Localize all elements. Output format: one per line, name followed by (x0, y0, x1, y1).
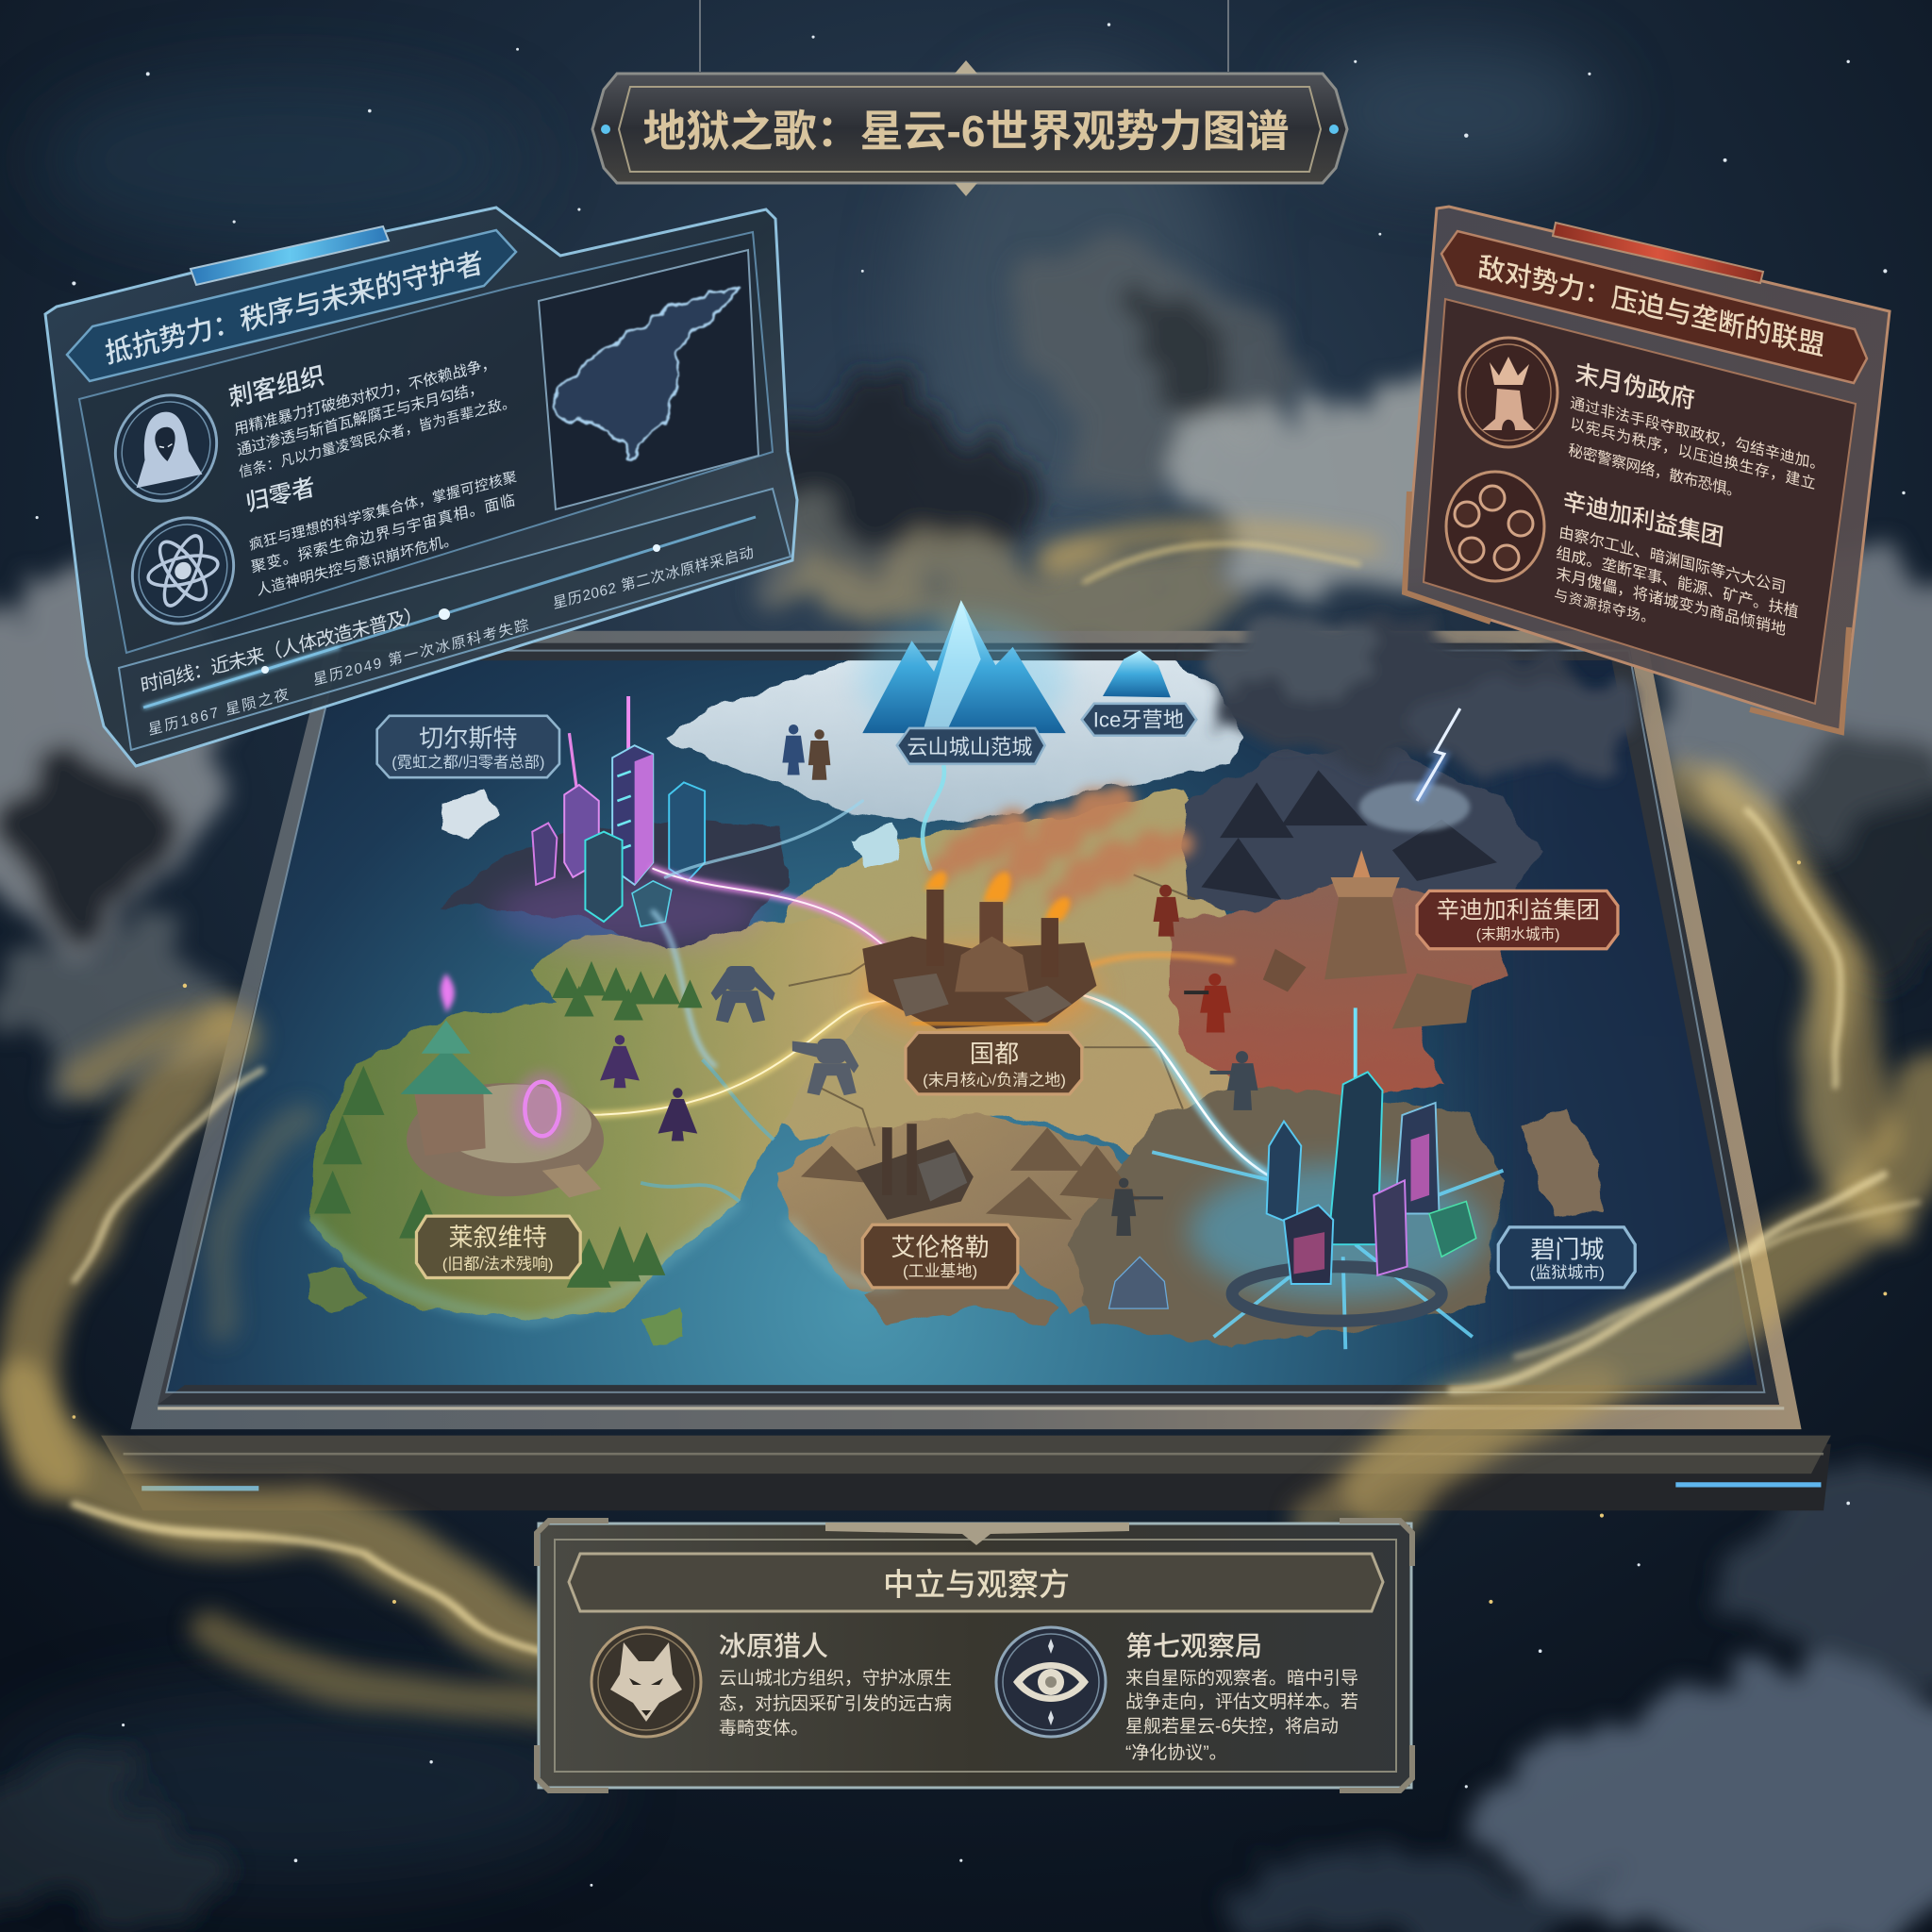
text block: syndicate: 辛迪加利益集团 (1561, 488, 1725, 551)
text block: zero returners: 疯狂与理想的科学家集合体，掌握可控核聚 (248, 469, 518, 554)
label: 辛迪加利益集团: (末期水城市) (1476, 925, 1559, 942)
panel image: nebula map (539, 250, 758, 509)
panel: resistance forces (45, 208, 797, 766)
lightning bolt (1417, 708, 1460, 801)
panel title bar: 中立与观察方 (883, 1567, 1070, 1602)
timeline: 星历1867 星陨之夜 (147, 686, 290, 739)
map frame outer body (106, 1444, 1831, 1510)
label: 碧门城: 碧门城 (1530, 1236, 1605, 1264)
text block: ice hunters: 毒畸变体。 (719, 1718, 808, 1739)
lightning crater (1359, 708, 1470, 832)
label: 碧门城: (监狱城市) (1530, 1263, 1605, 1281)
text block: syndicate (1554, 488, 1800, 639)
label: 艾伦格勒: 艾伦格勒 (891, 1233, 990, 1261)
text block: assassins: 用精准暴力打破绝对权力，不依赖战争， (233, 355, 497, 439)
city: Cherst neon towers (492, 696, 764, 949)
icon: hooded assassin (110, 386, 222, 510)
text block: seventh observatory: 星舰若星云-6失控，将启动 (1125, 1716, 1339, 1737)
text block: ice hunters (719, 1631, 952, 1739)
text block: syndicate: 与资源掠夺场。 (1554, 587, 1656, 627)
label: 莱叙维特: (旧都/法术残响) (442, 1255, 554, 1273)
timeline: 星历2049 第一次冰原科考失踪 (312, 616, 530, 689)
text block: seventh observatory: 第七观察局 (1125, 1631, 1262, 1662)
text block: syndicate: 由察尔工业、暗渊国际等六大公司 (1558, 523, 1787, 597)
label: 云山城山范城 (897, 728, 1045, 764)
panel title bar (1441, 231, 1867, 383)
text block: syndicate: 组成。垄断军事、能源、矿产。扶植 (1556, 543, 1800, 622)
label: 切尔斯特 (377, 716, 559, 777)
corner brackets (1405, 491, 1849, 732)
map screen with sea and terrain (166, 660, 1757, 1392)
city: south factory (857, 1124, 974, 1220)
map: south desert mountains (801, 1127, 1140, 1220)
map table (101, 600, 1848, 1510)
characters on the map (600, 724, 1258, 1236)
panel title bar: 抵抗势力：秩序与未来的守护者 (103, 247, 485, 370)
label: 莱叙维特 (416, 1216, 580, 1277)
title plate (592, 0, 1347, 196)
city: capital factory (862, 785, 1194, 1035)
text block: assassins: 刺客组织 (227, 360, 326, 412)
text block: seventh observatory: “净化协议”。 (1125, 1742, 1227, 1763)
text block: zero returners: 人造神明失控与意识崩坏危机。 (256, 529, 458, 599)
label: 切尔斯特: 切尔斯特 (419, 724, 518, 753)
icon: atom (127, 508, 239, 633)
city: fortress Lyshwit (400, 974, 604, 1198)
label: 辛迪加利益集团 (1417, 891, 1618, 949)
icon: five corporate seals (1446, 472, 1544, 581)
panel title bar (67, 230, 516, 381)
text block: ice hunters: 冰原猎人 (719, 1631, 828, 1662)
text block: seventh observatory: 来自星际的观察者。暗中引导 (1125, 1668, 1358, 1689)
ice mountains rising above the frame (858, 600, 1171, 740)
text block: zero returners (244, 469, 518, 599)
panel: neutral observers (537, 1521, 1412, 1790)
label: 艾伦格勒: (工业基地) (903, 1262, 977, 1280)
text block: puppet government (1568, 358, 1825, 501)
location labels (377, 704, 1635, 1288)
panel title bar: 敌对势力：压迫与垄断的联盟 (1476, 251, 1826, 362)
label: 艾伦格勒 (862, 1224, 1018, 1288)
map: terrain cracks and rivers (641, 874, 1195, 1201)
label: 国都: 国都 (970, 1040, 1019, 1068)
label: 碧门城 (1498, 1227, 1635, 1288)
gold energy wisps behind the map (86, 531, 1873, 1134)
timeline: 星历2062 第二次冰原样采启动 (552, 543, 755, 612)
title plate: 地狱之歌：星云-6世界观势力图谱 (643, 107, 1289, 156)
label: 云山城山范城: 云山城山范城 (907, 735, 1032, 758)
text block: ice hunters: 态，对抗因采矿引发的远古病 (719, 1693, 952, 1714)
forests (314, 961, 702, 1288)
panel top red bar (1553, 223, 1763, 283)
city: Bimen neon towers (1109, 1008, 1503, 1349)
label: 莱叙维特: 莱叙维特 (448, 1223, 547, 1251)
panel: hostile forces (1405, 207, 1890, 732)
storm clouds over the map (1201, 619, 1639, 770)
text block: puppet government: 末月伪政府 (1574, 358, 1696, 414)
text block: seventh observatory (1125, 1631, 1358, 1763)
icon: all-seeing eye (996, 1627, 1106, 1737)
text block: seventh observatory: 战争走向，评估文明样本。若 (1125, 1691, 1358, 1712)
label: 辛迪加利益集团: 辛迪加利益集团 (1436, 897, 1600, 924)
gold energy wisps in front of the map (19, 789, 1932, 1707)
text block: puppet government: 通过非法手段夺取政权，勾结辛迪加。 (1570, 394, 1825, 475)
land masses (308, 641, 1605, 1345)
icon: crown tower (1459, 338, 1557, 447)
panel top glow bar (191, 226, 389, 285)
map: coast glow (308, 1201, 740, 1321)
energy streams (579, 766, 1281, 1183)
red tower (1263, 850, 1473, 1029)
text block: puppet government: 以宪兵为秩序，以压迫换生存，建立 (1570, 415, 1816, 492)
timeline: 时间线：近未来（人体改造未普及） (139, 603, 424, 697)
label: Ice牙营地: Ice牙营地 (1093, 708, 1184, 732)
text block: syndicate: 末月傀儡，将诸城变为商品倾销地 (1556, 564, 1787, 639)
label: 国都 (906, 1033, 1082, 1094)
text block: ice hunters: 云山城北方组织，守护冰原生 (719, 1668, 952, 1689)
timeline (119, 489, 791, 750)
label: Ice牙营地 (1082, 704, 1196, 736)
text block: zero returners: 归零者 (244, 474, 317, 517)
text block: zero returners: 聚变。探索生命边界与宇宙真相。面临 (250, 491, 516, 576)
text block: assassins: 通过渗透与斩首瓦解腐王与末月勾结， (236, 379, 484, 459)
label: 切尔斯特: (霓虹之都/归零者总部) (391, 755, 544, 772)
map: dark mountain range (1201, 770, 1497, 899)
text block: assassins (227, 355, 516, 481)
text block: puppet government: 秘密警察网络，散布恐惧。 (1568, 441, 1742, 501)
icon: wolf (591, 1627, 701, 1737)
text block: assassins: 信条：凡以力量凌驾民众者，皆为吾辈之敌。 (238, 394, 516, 481)
label: 国都: (末月核心/负清之地) (923, 1072, 1066, 1090)
frame gloss edges (158, 643, 1779, 1405)
panel title bar (569, 1554, 1383, 1611)
